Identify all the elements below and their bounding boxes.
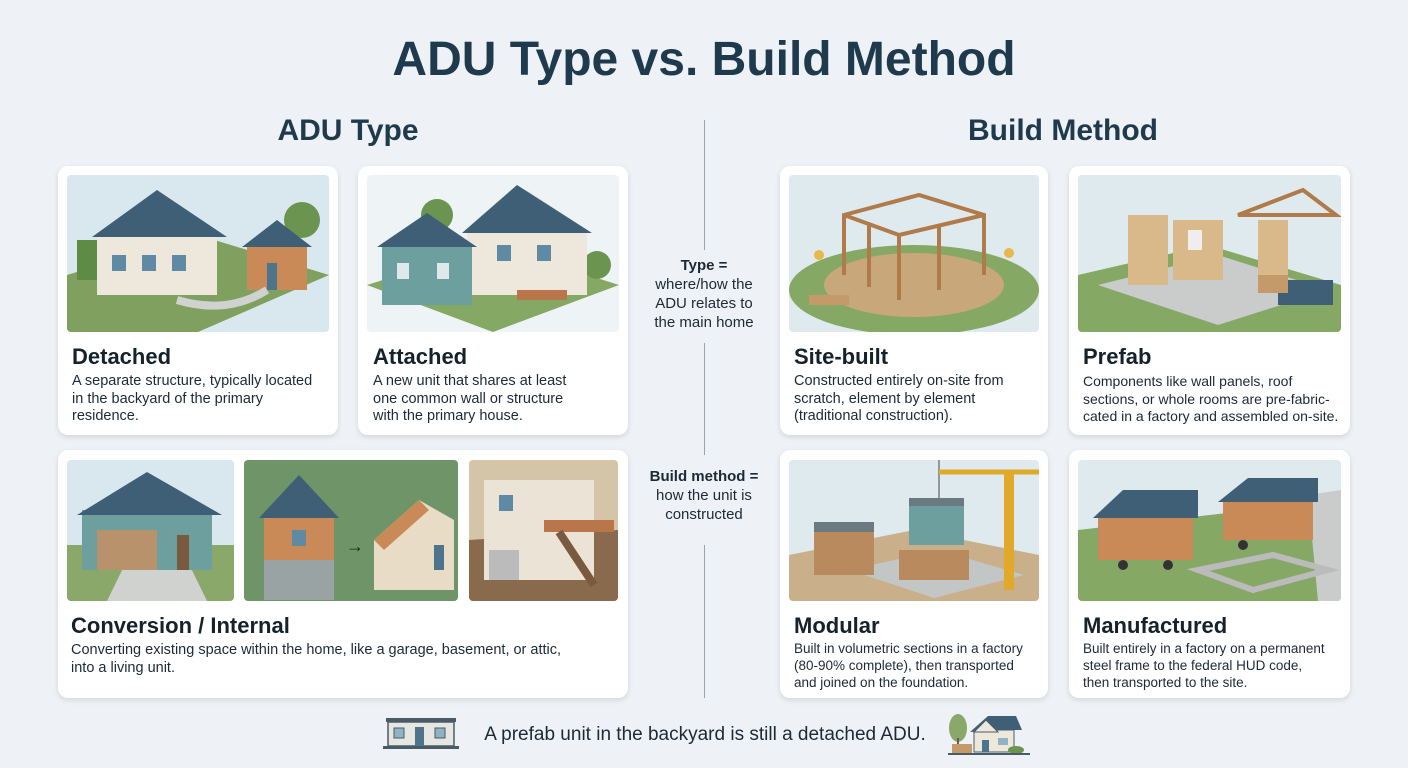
description: scratch, element by element <box>794 390 975 406</box>
description <box>794 373 1004 424</box>
description: steel frame to the federal HUD code, <box>1083 658 1302 673</box>
description <box>71 642 561 676</box>
panel: modular <box>780 450 1048 698</box>
note: type definition: ADU relates to <box>655 295 753 312</box>
footer note: A prefab unit in the backyard is still a detached ADU. <box>484 724 926 745</box>
panel: manufactured <box>1069 450 1350 698</box>
panel: attached <box>358 166 628 435</box>
panel: detached <box>58 166 338 435</box>
title: Site-built: Site-built <box>794 344 888 369</box>
description <box>794 641 1023 690</box>
description <box>373 373 566 424</box>
note: build method definition: Build method = <box>650 468 758 485</box>
illustration: attic <box>244 460 458 601</box>
note: build method definition: constructed <box>665 506 743 523</box>
description: (80-90% complete), then transported <box>794 658 1014 673</box>
description: residence. <box>72 408 139 424</box>
illustration: attic: → <box>346 536 364 556</box>
description <box>1083 373 1338 424</box>
heading: ADU Type: ADU Type <box>277 114 419 147</box>
illustration: trailer homes <box>1078 460 1341 601</box>
description: Built entirely in a factory on a permanent <box>1083 641 1325 656</box>
illustration: panels <box>1078 175 1341 332</box>
description: Constructed entirely on-site from <box>794 373 1004 389</box>
note: build method definition <box>650 468 758 523</box>
description: in the backyard of the primary <box>72 390 263 406</box>
description: Built in volumetric sections in a factory <box>794 641 1023 656</box>
illustration: attached <box>367 175 619 332</box>
note: type definition: Type = <box>681 257 727 274</box>
description <box>1083 641 1325 690</box>
description: (traditional construction). <box>794 408 953 424</box>
icon: prefab unit <box>383 718 459 749</box>
illustration: framing <box>789 175 1039 332</box>
description: then transported to the site. <box>1083 675 1247 690</box>
description: A separate structure, typically located <box>72 373 312 389</box>
description: one common wall or structure <box>373 390 563 406</box>
panel: site-built <box>780 166 1048 435</box>
illustration: basement <box>469 460 618 601</box>
title: Detached: Detached <box>72 344 171 369</box>
description: Components like wall panels, roof <box>1083 373 1292 389</box>
description: with the primary house. <box>373 408 523 424</box>
illustration: garage <box>67 460 234 601</box>
title: Prefab: Prefab <box>1083 344 1151 369</box>
illustration: detached <box>67 175 329 332</box>
title: ADU Type vs. Build Method <box>392 33 1016 86</box>
illustration: crane modules <box>789 460 1039 601</box>
panel: conversion <box>58 450 628 698</box>
panel: prefab <box>1069 166 1350 435</box>
description: cated in a factory and assembled on-site. <box>1083 408 1338 424</box>
title: Attached: Attached <box>373 344 467 369</box>
heading: Build Method: Build Method <box>968 114 1158 147</box>
description: into a living unit. <box>71 660 175 676</box>
description: Converting existing space within the home, like a garage, basement, or attic, <box>71 642 561 658</box>
description: sections, or whole rooms are pre-fabric- <box>1083 390 1330 406</box>
note: build method definition: how the unit is <box>656 487 752 504</box>
note: type definition: the main home <box>654 314 754 331</box>
description: A new unit that shares at least <box>373 373 566 389</box>
title: Manufactured: Manufactured <box>1083 613 1227 638</box>
title: Modular: Modular <box>794 613 880 638</box>
note: type definition <box>654 257 754 331</box>
description <box>72 373 312 424</box>
note: type definition: where/how the <box>655 276 753 293</box>
description: and joined on the foundation. <box>794 675 968 690</box>
title: Conversion: Conversion / Internal <box>71 613 290 638</box>
icon: house with tree <box>948 714 1030 755</box>
